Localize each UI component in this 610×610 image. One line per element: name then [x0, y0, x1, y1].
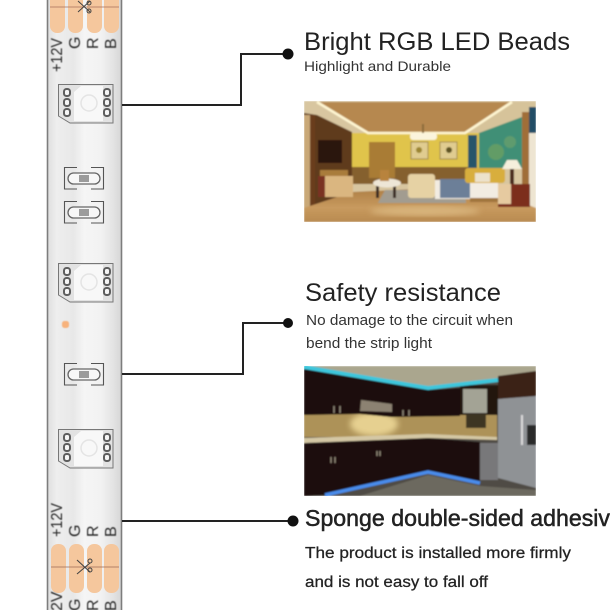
- heading: safety: Safety resistance: [305, 279, 501, 307]
- yellow wall: [352, 133, 480, 169]
- range hood: [360, 400, 392, 412]
- lower polarity labels: +12V: [49, 503, 66, 537]
- bed: [435, 180, 498, 199]
- ceiling: [311, 366, 536, 387]
- bottom cut line with scissors: [51, 559, 119, 574]
- backsplash: [304, 413, 497, 437]
- top polarity labels: +12V: [49, 38, 66, 72]
- connector: adhesive: [122, 516, 298, 526]
- left wall: [304, 113, 352, 208]
- wall cabinet glass: [463, 389, 487, 413]
- wainscot: [352, 167, 470, 184]
- dishwasher: [480, 443, 498, 480]
- lamp: [502, 160, 522, 169]
- lower handles: [331, 451, 380, 463]
- tv: [318, 140, 342, 163]
- top polarity labels: G: [67, 37, 84, 49]
- cropped bottom labels: [49, 591, 120, 610]
- lower polarity labels: [49, 503, 120, 537]
- nightstand: [498, 184, 530, 207]
- top polarity labels: [49, 37, 120, 72]
- text: adhesive line 2: and is not easy to fall off: [305, 574, 489, 591]
- ceiling light: [317, 102, 512, 133]
- top cut line with scissors: [50, 1, 119, 13]
- text: safety line 1: No damage to the circuit when: [306, 313, 513, 329]
- subheading: beads: Highlight and Durable: [304, 58, 451, 74]
- sofa: [408, 174, 435, 198]
- small LED 1: [64, 168, 104, 189]
- orange dot: [62, 321, 69, 328]
- counter: [304, 434, 497, 443]
- text: safety line 2: bend the strip light: [306, 336, 432, 352]
- lower polarity labels: B: [103, 526, 120, 537]
- lower polarity labels: G: [67, 525, 84, 537]
- lower polarity labels: R: [85, 525, 102, 537]
- small LED 2: [64, 202, 104, 223]
- text: adhesive line 1: The product is installed more firmly: [305, 545, 571, 562]
- strip body: [48, 0, 122, 610]
- LED chip 2: [58, 264, 113, 302]
- mural: [479, 117, 522, 168]
- right wall: [522, 112, 529, 192]
- chandelier: [410, 133, 437, 140]
- fridge: [498, 396, 536, 488]
- kick light: [325, 472, 480, 495]
- coffee table: [376, 186, 379, 198]
- console: [318, 176, 353, 197]
- photo: kitchen: [304, 366, 536, 496]
- rug: [378, 190, 466, 203]
- curtain: [468, 135, 477, 170]
- upper right cabinets: [498, 371, 536, 400]
- floor sheen: [360, 475, 536, 496]
- floor: [304, 186, 536, 222]
- ceiling: [317, 102, 512, 133]
- LED chip 3: [58, 430, 113, 468]
- right upper corner: [465, 102, 536, 133]
- heading: adhesive: Sponge double-sided adhesiv: [305, 505, 610, 531]
- cove light: [304, 367, 498, 388]
- handles: [334, 406, 409, 416]
- door: [369, 142, 395, 178]
- lower cabinets: [304, 438, 480, 496]
- top copper pads: [50, 0, 119, 33]
- paintings: [411, 142, 428, 159]
- photo: bedroom: [304, 101, 536, 222]
- heading: beads: Bright RGB LED Beads: [304, 28, 570, 56]
- upper cabinets: [304, 369, 460, 417]
- top polarity labels: B: [103, 38, 120, 49]
- small LED 3: [64, 364, 104, 385]
- connector: beads: [122, 48, 294, 105]
- bottom copper pads: [51, 544, 119, 593]
- connector: safety: [122, 318, 293, 374]
- LED strip: [48, 0, 122, 610]
- top polarity labels: R: [85, 37, 102, 49]
- LED chip 1: [58, 84, 113, 123]
